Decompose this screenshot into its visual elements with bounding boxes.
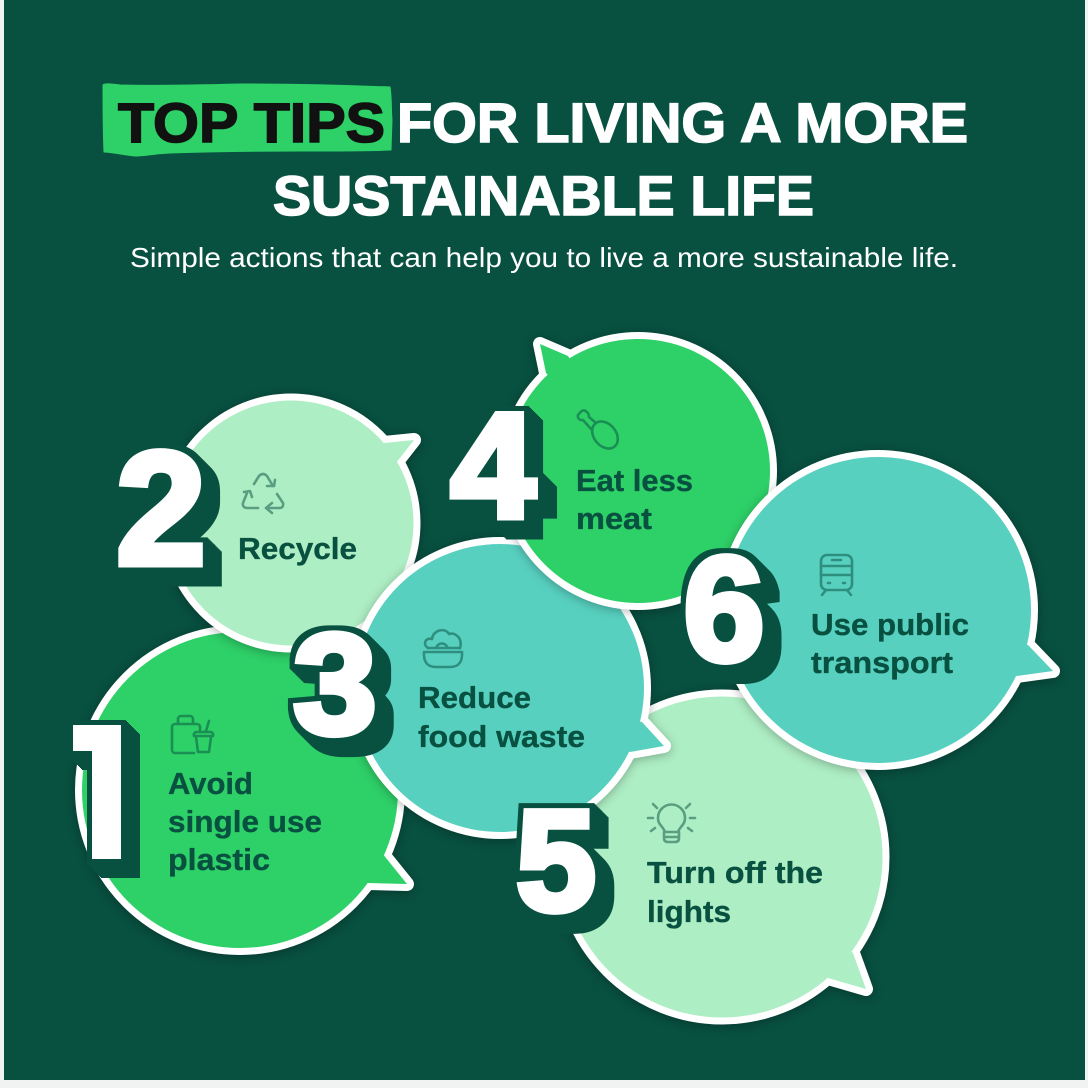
label: single use <box>168 804 322 839</box>
label: Eat less <box>576 463 693 498</box>
title <box>103 84 968 227</box>
label: Use public <box>811 607 969 642</box>
label: food waste <box>418 719 585 754</box>
panel: tip 4 eat less meat <box>506 339 770 603</box>
number 1 <box>73 720 140 878</box>
title highlight <box>103 84 392 156</box>
icon: bag and cup <box>172 716 213 753</box>
label <box>647 855 823 929</box>
number 2: 2 <box>116 419 206 599</box>
icon: train <box>821 555 852 595</box>
number 5: 5 <box>516 782 596 941</box>
label <box>576 463 693 536</box>
label: Avoid <box>168 766 253 801</box>
label <box>168 766 322 877</box>
panel: tip 2 recycle <box>168 400 414 646</box>
title words: top tips: TOP TIPS <box>118 91 385 154</box>
number 1: 1 <box>52 688 156 897</box>
label: Turn off the <box>647 855 823 890</box>
label: Recycle <box>238 531 357 566</box>
panel: tip 6 use public transport <box>725 457 1053 763</box>
panel: tip 1 avoid single use plastic <box>82 632 407 948</box>
label <box>811 607 969 680</box>
title words: for living a more: FOR LIVING A MORE <box>397 91 968 154</box>
icon: salad bowl <box>424 630 462 667</box>
number 3: 3 <box>294 604 376 763</box>
label: Reduce <box>418 680 531 715</box>
label <box>418 680 585 754</box>
label: meat <box>576 501 652 536</box>
subtitle: Simple actions that can help you to live a more sustainable life. <box>130 242 958 273</box>
label: transport <box>811 645 953 680</box>
label: lights <box>647 894 731 929</box>
title words: sustainable life: SUSTAINABLE LIFE <box>273 164 814 227</box>
number 6: 6 <box>684 527 764 692</box>
icon: light bulb <box>648 804 695 842</box>
label: plastic <box>168 842 270 877</box>
number 4: 4 <box>451 382 535 549</box>
icon: recycle arrows <box>243 474 283 513</box>
panel: tip 3 reduce food waste <box>356 544 664 832</box>
panel: tip 5 turn off the lights <box>562 696 882 1018</box>
icon: drumstick <box>578 410 623 454</box>
